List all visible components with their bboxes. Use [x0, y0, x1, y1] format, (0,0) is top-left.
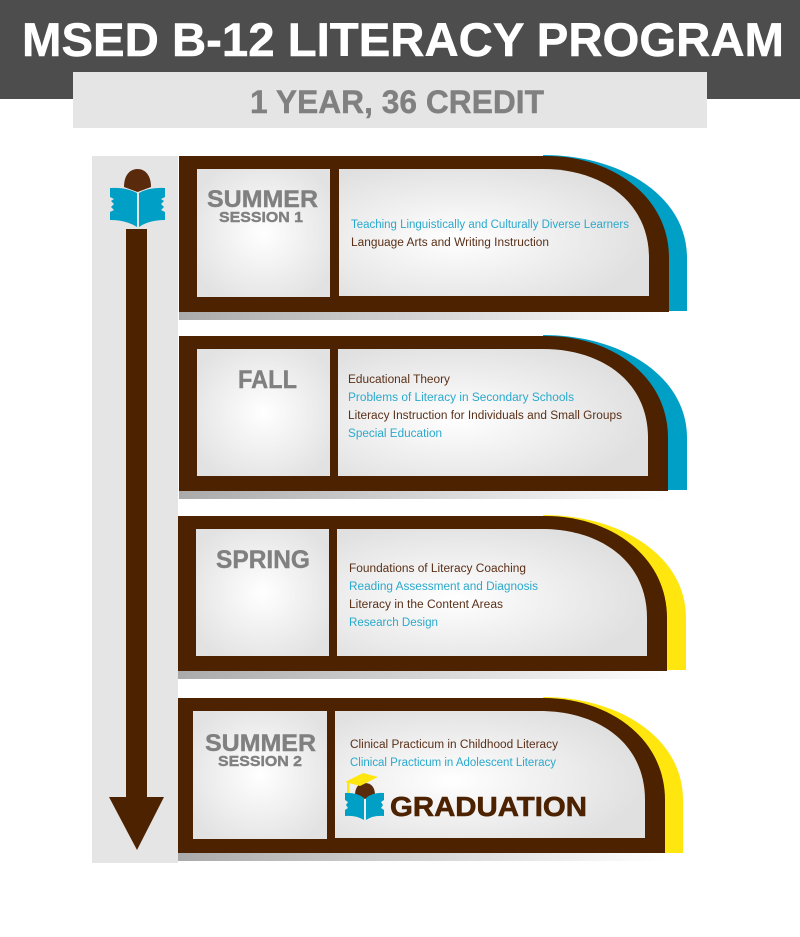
course list — [351, 219, 629, 249]
panel: spring — [178, 515, 686, 679]
heading: SPRING — [216, 546, 310, 574]
course list — [348, 374, 622, 440]
course list — [349, 563, 538, 629]
course list: Educational Theory — [348, 374, 450, 386]
course list: Language Arts and Writing Instruction — [351, 237, 549, 249]
heading: SUMMER — [207, 186, 318, 213]
course list: Literacy in the Content Areas — [349, 599, 503, 611]
panel: summer session 2 — [178, 697, 683, 861]
timeline arrow — [109, 229, 164, 850]
panel: fall — [179, 335, 687, 499]
subtitle band — [73, 72, 707, 128]
subheading: SESSION 1 — [219, 209, 303, 226]
subheading: SESSION 2 — [218, 753, 302, 770]
title banner — [0, 0, 800, 99]
course list: Clinical Practicum in Adolescent Literacy — [350, 757, 556, 769]
title: MSED B-12 LITERACY PROGRAM — [22, 13, 784, 66]
course list: Teaching Linguistically and Culturally Diverse Learners — [351, 219, 629, 231]
course list: Foundations of Literacy Coaching — [349, 563, 526, 575]
course list: Clinical Practicum in Childhood Literacy — [350, 739, 558, 751]
course list: Research Design — [349, 617, 438, 629]
icon: reading book — [110, 169, 165, 227]
graduation label: GRADUATION — [390, 791, 587, 822]
panel: summer session 1 — [179, 155, 687, 320]
course list: Problems of Literacy in Secondary Schools — [348, 392, 574, 404]
subtitle: 1 YEAR, 36 CREDIT — [250, 84, 544, 120]
heading: FALL — [238, 366, 297, 394]
course list: Special Education — [348, 428, 442, 440]
course list: Literacy Instruction for Individuals and Small Groups — [348, 410, 622, 422]
icon: graduation book — [345, 773, 384, 820]
heading: SUMMER — [205, 730, 316, 757]
timeline band — [92, 156, 178, 863]
course list — [350, 739, 558, 769]
course list: Reading Assessment and Diagnosis — [349, 581, 538, 593]
